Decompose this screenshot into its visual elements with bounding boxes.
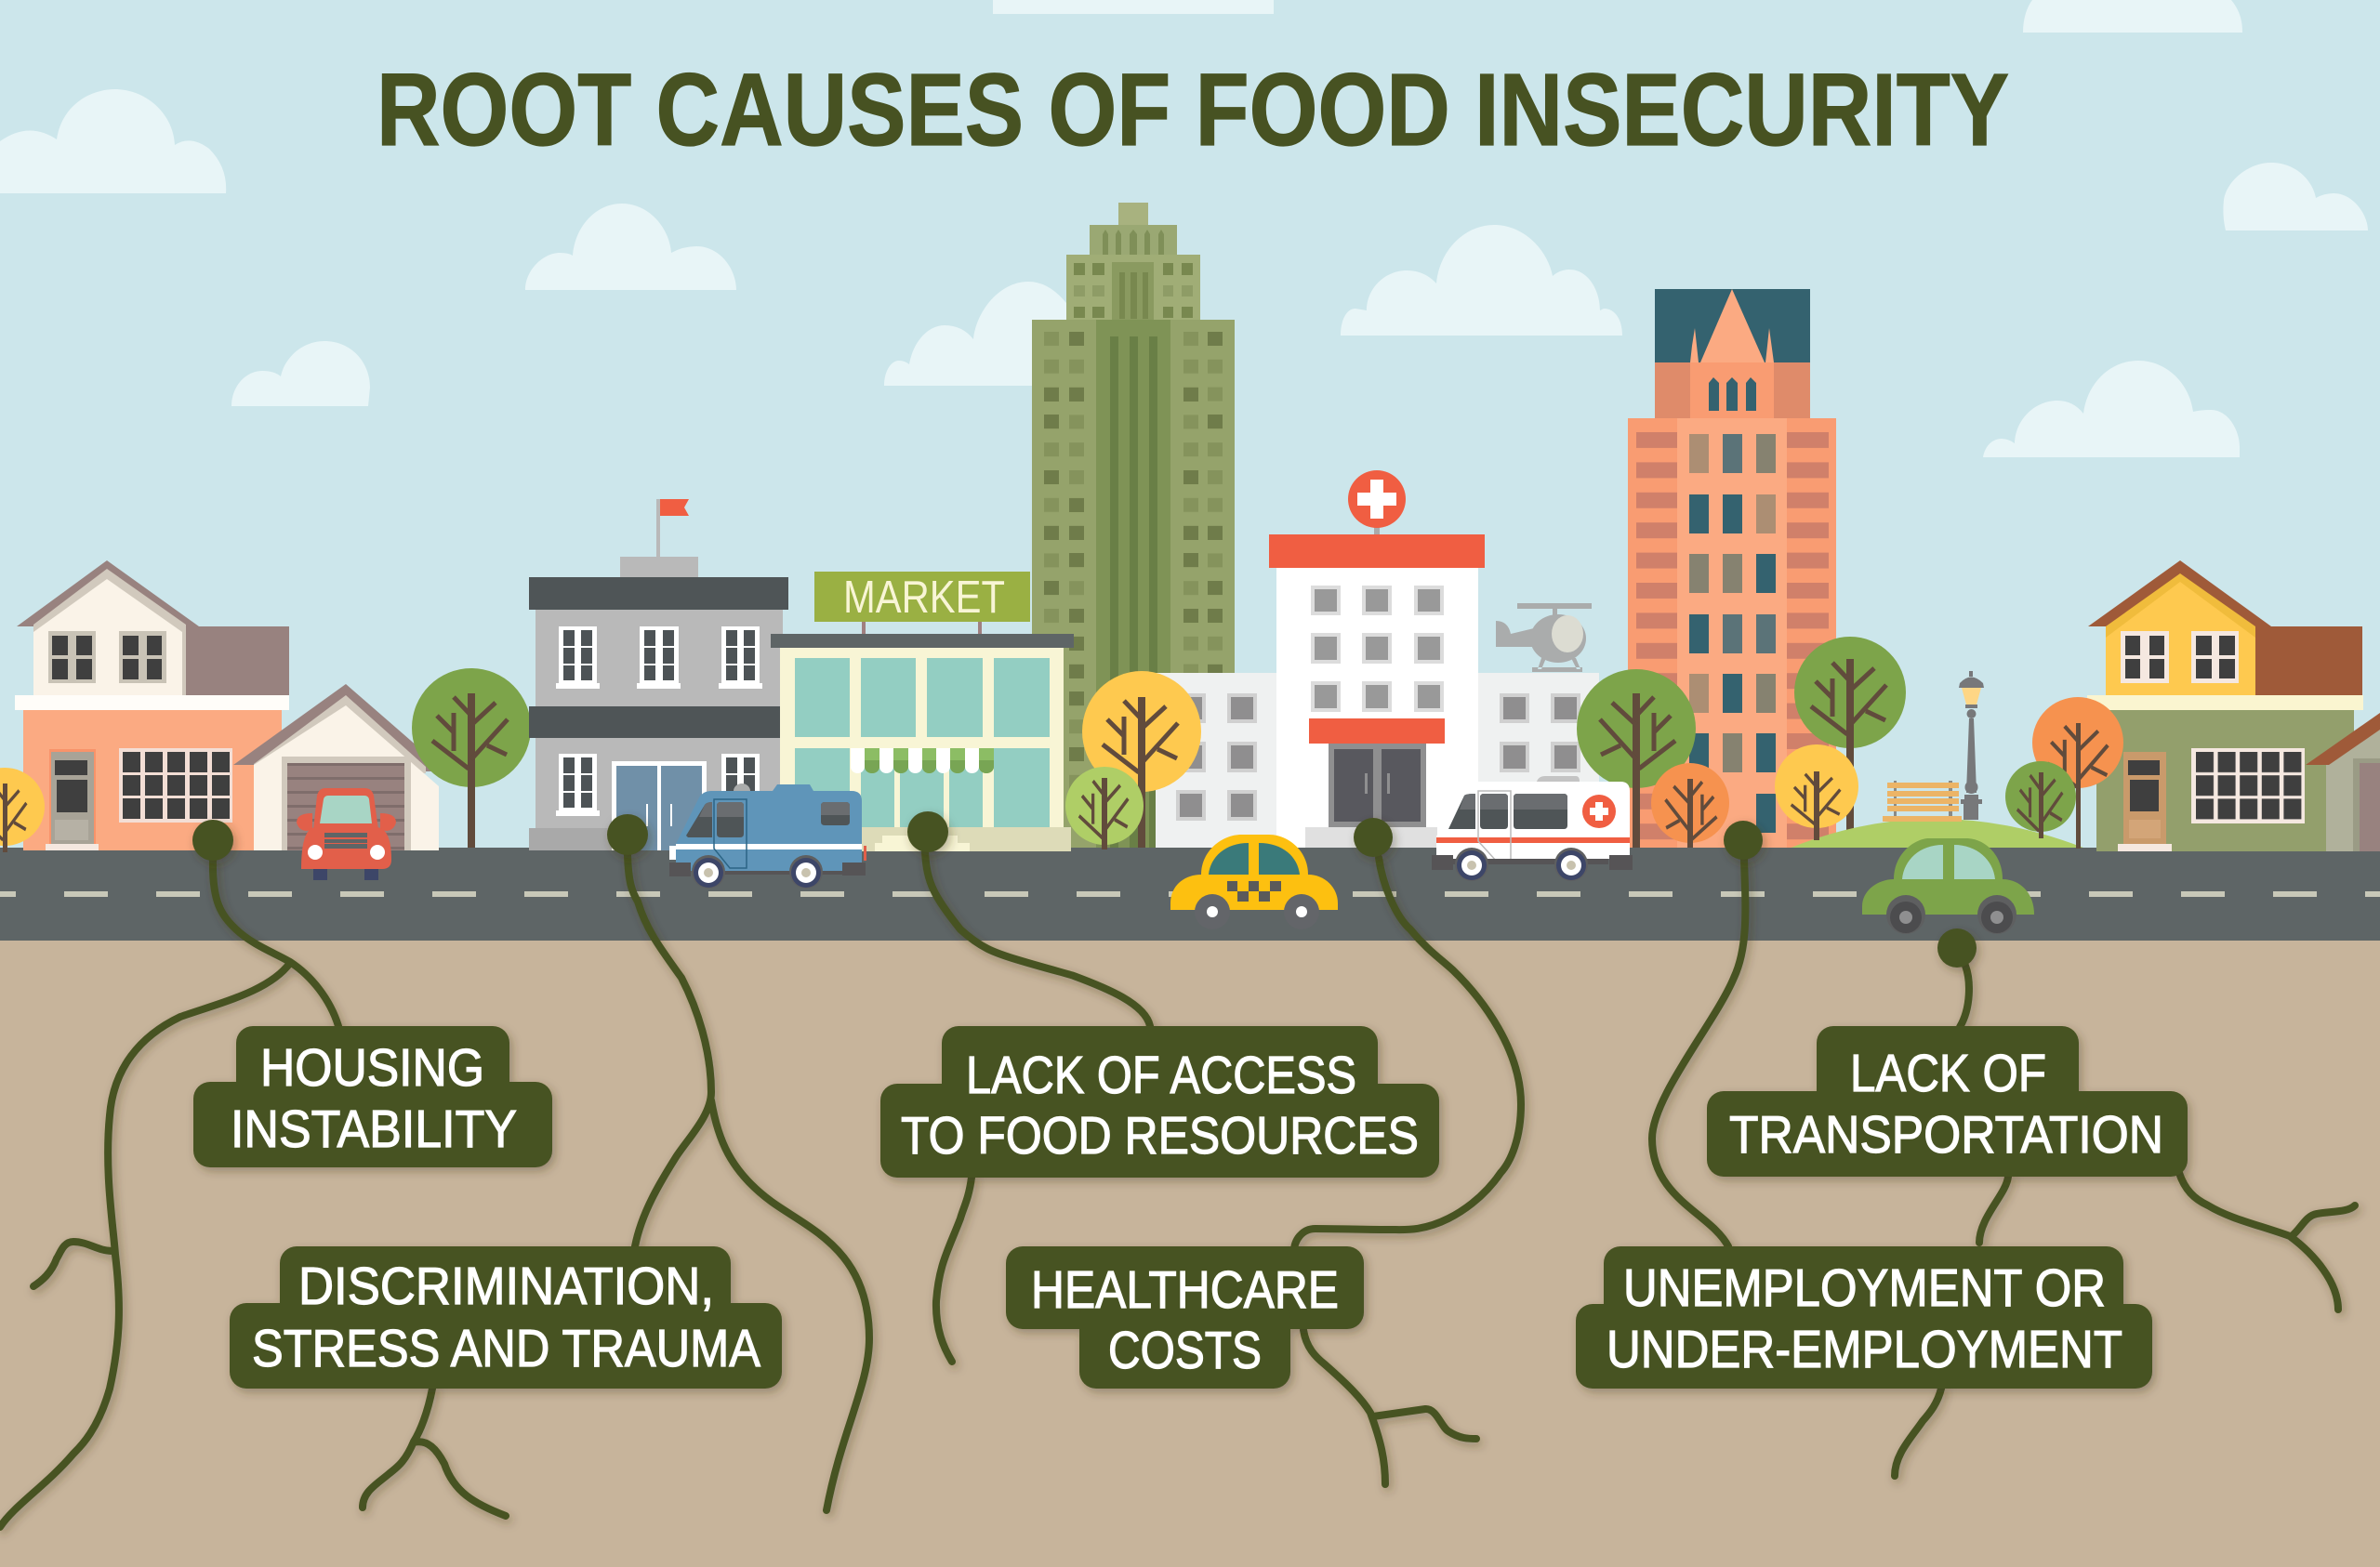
label: discrimination, stress and trauma: DISCRIMINATION, xyxy=(298,1257,714,1316)
sky background xyxy=(0,0,2380,941)
house: green, right xyxy=(2087,560,2363,851)
label: unemployment or under-employment: UNEMPLOYMENT OR xyxy=(1623,1258,2106,1318)
roots network xyxy=(0,852,2355,1527)
awning xyxy=(851,748,994,773)
label: healthcare costs: COSTS xyxy=(1108,1321,1262,1380)
house: peach, left xyxy=(15,560,289,850)
tree: small green by house xyxy=(2005,761,2076,838)
blue van xyxy=(669,784,866,889)
label: housing instability: HOUSING xyxy=(260,1038,484,1098)
label: lack of access to food resources xyxy=(880,1026,1439,1178)
title: ROOT CAUSES OF FOOD INSECURITY xyxy=(377,53,2009,167)
label: lack of transportation xyxy=(1707,1026,2188,1177)
red car xyxy=(297,788,396,880)
label: discrimination, stress and trauma xyxy=(230,1246,782,1389)
road dashes xyxy=(0,891,2380,897)
root: unemployment xyxy=(1652,860,1941,1476)
label: discrimination, stress and trauma: STRESS AND TRAUMA xyxy=(252,1319,760,1378)
market building xyxy=(771,572,1074,851)
tree: yellow by market xyxy=(1082,671,1201,849)
garage: left xyxy=(233,684,446,850)
grey office building xyxy=(529,499,788,850)
green car xyxy=(1862,838,2034,934)
green hill xyxy=(1782,819,2093,851)
tree: orange by house xyxy=(2032,697,2123,849)
ground xyxy=(0,941,2380,1567)
root: healthcare costs xyxy=(1294,858,1521,1484)
root: housing instability xyxy=(0,860,338,1527)
root: lack of access xyxy=(925,852,1150,1362)
hospital sign xyxy=(1348,470,1406,528)
hospital building xyxy=(1269,470,1485,848)
hospital side wings xyxy=(1156,673,1599,848)
label: unemployment or under-employment xyxy=(1576,1246,2152,1389)
park bench xyxy=(1887,781,1959,839)
flag xyxy=(660,499,689,516)
root: lack of transportation xyxy=(1960,966,2355,1310)
tree: small yellow xyxy=(1775,744,1858,840)
clouds xyxy=(0,0,2368,457)
label: lack of transportation: TRANSPORTATION xyxy=(1729,1105,2163,1165)
root: discrimination bottom xyxy=(363,1389,506,1516)
orange skyscraper xyxy=(1628,289,1836,849)
tree: small orange xyxy=(1651,763,1729,848)
helicopter xyxy=(1496,603,1592,672)
label: lack of transportation: LACK OF xyxy=(1850,1044,2046,1103)
lamp post xyxy=(1959,671,1984,820)
market sign xyxy=(814,572,1030,634)
tree: green right xyxy=(1794,637,1906,832)
ambulance xyxy=(1432,776,1633,881)
tree: partial yellow at left edge xyxy=(0,768,45,852)
tree: green left xyxy=(412,668,531,848)
bench seat xyxy=(1883,816,1962,822)
label: housing instability xyxy=(193,1026,552,1167)
garage: right, partial xyxy=(2306,713,2380,851)
label: healthcare costs xyxy=(1006,1246,1364,1389)
label: lack of access to food resources: TO FOOD RESOURCES xyxy=(901,1106,1419,1165)
label: lack of access to food resources: LACK OF ACCESS xyxy=(966,1046,1356,1105)
label: healthcare costs: HEALTHCARE xyxy=(1031,1260,1339,1320)
root nodes xyxy=(192,811,1977,968)
label: housing instability: INSTABILITY xyxy=(231,1100,517,1159)
ambulance cross xyxy=(1582,795,1616,828)
tree: green by ambulance xyxy=(1577,669,1696,848)
root: discrimination xyxy=(628,855,869,1510)
yellow taxi xyxy=(1170,835,1338,929)
label: unemployment or under-employment: UNDER-EMPLOYMENT xyxy=(1606,1320,2122,1379)
market sign: MARKET xyxy=(843,573,1005,623)
green skyscraper xyxy=(1032,203,1235,849)
tree: small light green xyxy=(1065,767,1144,849)
road xyxy=(0,848,2380,941)
